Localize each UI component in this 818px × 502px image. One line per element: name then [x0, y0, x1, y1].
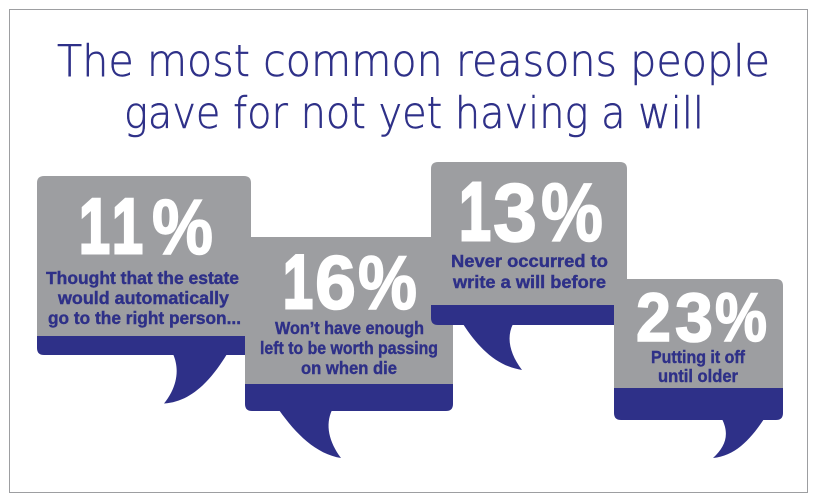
- speech bubble: 13%: [431, 162, 627, 370]
- description: passing on: left to be worth passing: [260, 338, 438, 358]
- statistic: 16%: 6: [315, 241, 356, 326]
- statistic: 23%: 2: [636, 279, 671, 356]
- statistic: 16%: [283, 240, 417, 326]
- speech bubble: 23%: [614, 279, 783, 458]
- statistic: 16%: %: [358, 241, 417, 326]
- description: passing on: on when die: [301, 358, 397, 378]
- description: putting it off: [651, 347, 745, 386]
- speech bubble: 16%: [245, 237, 453, 458]
- description: passing on: Won’t have enough: [275, 318, 424, 338]
- description: never occurred: [451, 251, 608, 292]
- title: [57, 36, 770, 139]
- statistic: 13%: 1: [459, 165, 491, 258]
- title: The most common reasons people: [57, 36, 770, 87]
- statistic: 13%: %: [541, 166, 603, 259]
- statistic: 11%: 1: [112, 182, 143, 270]
- statistic: 23%: 3: [675, 279, 713, 356]
- speech bubble: 11%: [37, 176, 251, 404]
- description: estate: Thought that the estate: [46, 268, 239, 288]
- statistic: 13%: 3: [493, 166, 537, 259]
- description: estate: would automatically: [57, 288, 229, 308]
- statistic: 16%: 1: [283, 240, 313, 325]
- statistic: 13%: [459, 165, 603, 259]
- statistic: 23%: %: [715, 279, 767, 356]
- statistic: 11%: %: [152, 183, 213, 271]
- statistic: 11%: [79, 182, 213, 271]
- description: never occurred: write a will before: [452, 272, 606, 292]
- title: gave for not yet having a will: [124, 88, 704, 139]
- description: putting it off: until older: [658, 366, 738, 386]
- description: putting it off: Putting it off: [651, 347, 745, 367]
- description: passing on: [260, 318, 438, 378]
- description: never occurred: Never occurred to: [451, 251, 608, 271]
- description: estate: go to the right person...: [48, 308, 241, 328]
- statistic: 23%: [636, 279, 767, 356]
- statistic: 11%: 1: [79, 182, 110, 270]
- description: estate: [46, 268, 241, 328]
